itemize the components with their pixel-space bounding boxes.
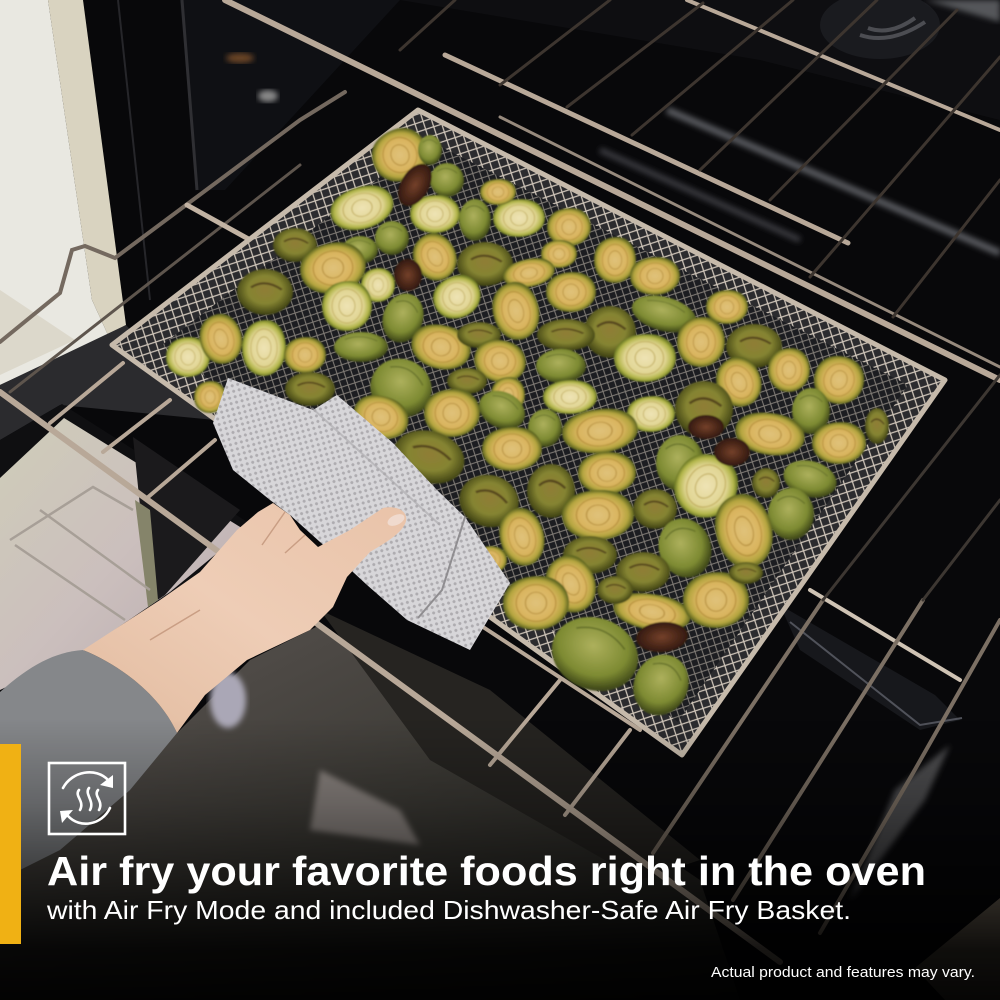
yellow accent bar	[0, 744, 21, 944]
convection fan	[820, 0, 940, 59]
sleeve	[0, 650, 177, 880]
title: Air fry your favorite foods right in the oven	[47, 848, 926, 894]
towel	[213, 378, 510, 650]
hand	[83, 503, 406, 733]
disclaimer: Actual product and features may vary.	[711, 965, 975, 981]
subtitle: with Air Fry Mode and included Dishwasher-Safe Air Fry Basket.	[46, 895, 851, 925]
roasted brussels sprouts	[166, 121, 889, 725]
air fry basket	[112, 110, 945, 755]
bottom gradient	[0, 720, 1000, 1000]
icon: air fry	[49, 763, 125, 834]
